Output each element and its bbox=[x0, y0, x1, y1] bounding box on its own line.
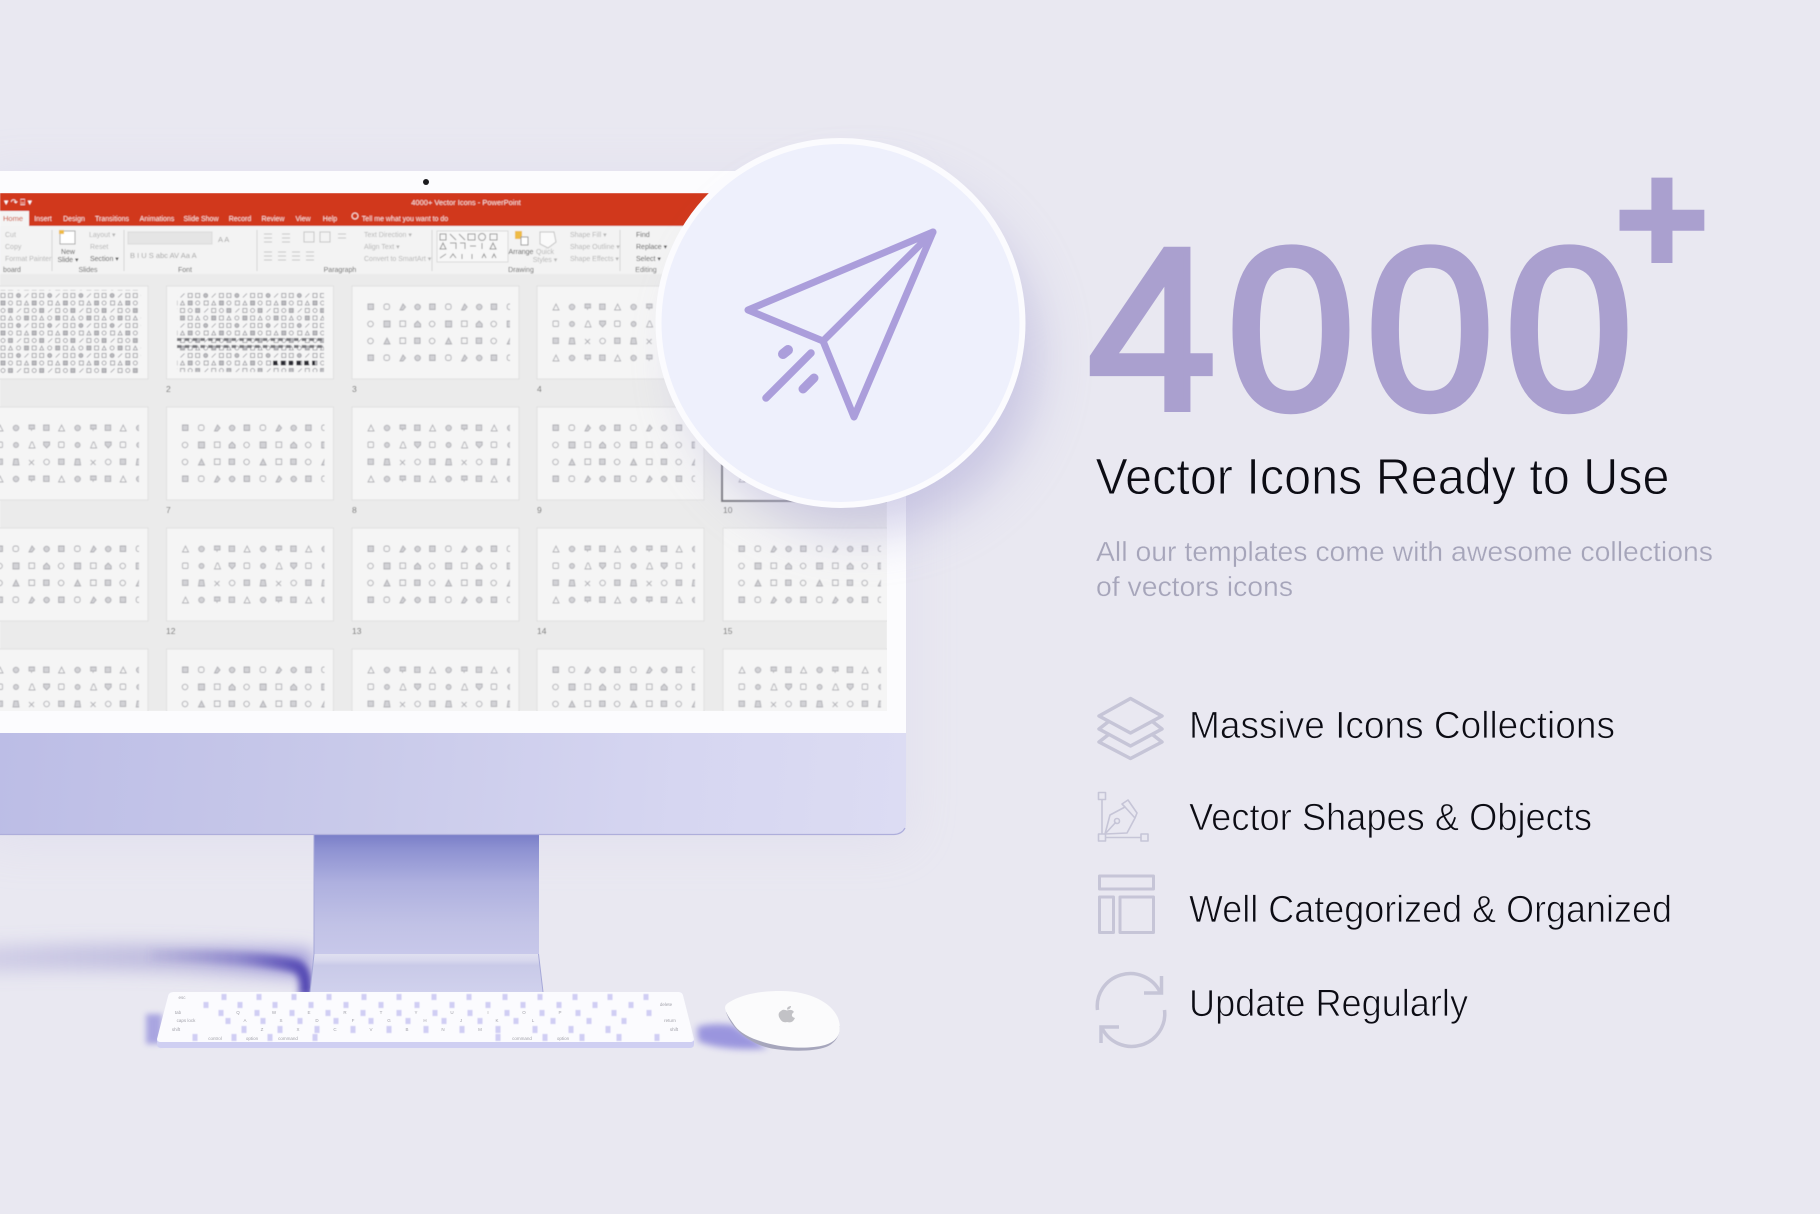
new slide icon bbox=[60, 231, 75, 244]
key labels: T bbox=[380, 1010, 383, 1015]
ribbon: New bbox=[61, 249, 76, 256]
label: Massive Icons Collections bbox=[1189, 705, 1615, 747]
ribbon: board bbox=[3, 267, 21, 274]
ribbon: Align Text ▾ bbox=[364, 244, 400, 251]
key labels: V bbox=[369, 1027, 373, 1032]
icon: refresh arrows bbox=[1097, 974, 1165, 1046]
ribbon tabs: Slide Show bbox=[183, 216, 219, 223]
key gaps bbox=[195, 994, 657, 1041]
key labels bbox=[172, 995, 679, 1041]
key labels: K bbox=[495, 1018, 499, 1023]
key labels: shift bbox=[172, 1027, 181, 1032]
ribbon: Shape Fill ▾ bbox=[570, 232, 607, 239]
feature: update regularly bbox=[1097, 974, 1468, 1046]
screen: PowerPoint window bbox=[0, 193, 891, 742]
key labels: S bbox=[279, 1018, 283, 1023]
key labels: A bbox=[243, 1018, 247, 1023]
slide numbers: 14 bbox=[537, 626, 547, 636]
ribbon: Arrange bbox=[509, 249, 534, 256]
slide numbers: 9 bbox=[537, 505, 542, 515]
slide numbers: 8 bbox=[352, 505, 357, 515]
ribbon: Slide ▾ bbox=[57, 257, 79, 264]
apple logo bbox=[779, 1006, 795, 1022]
slide numbers: 15 bbox=[723, 626, 733, 636]
ribbon tabs bbox=[34, 216, 448, 223]
slide numbers: 10 bbox=[723, 505, 733, 515]
webcam bbox=[423, 179, 429, 185]
ribbon: Select ▾ bbox=[636, 256, 661, 263]
ribbon: Shape Outline ▾ bbox=[570, 244, 620, 251]
circle bbox=[658, 141, 1022, 505]
description bbox=[1096, 536, 1713, 602]
ribbon tabs: Animations bbox=[140, 216, 175, 223]
quick styles icon bbox=[540, 232, 556, 248]
key labels: return bbox=[664, 1018, 676, 1023]
ribbon: Convert to SmartArt ▾ bbox=[364, 256, 432, 263]
key labels: tab bbox=[175, 1010, 182, 1015]
monitor chin bbox=[0, 733, 906, 835]
ribbon tabs: Help bbox=[323, 216, 337, 223]
circle shadow bbox=[687, 181, 1037, 531]
ribbon tabs: Transitions bbox=[95, 216, 129, 223]
ribbon tabs: Record bbox=[229, 216, 251, 223]
keyboard body bbox=[157, 992, 694, 1048]
key labels: G bbox=[387, 1018, 391, 1023]
key labels: L bbox=[532, 1018, 535, 1023]
ribbon: Drawing bbox=[508, 267, 534, 274]
ribbon tabs: Tell me what you want to do bbox=[362, 216, 448, 223]
ribbon: Copy bbox=[5, 244, 22, 251]
key labels: shift bbox=[670, 1027, 679, 1032]
key labels: Z bbox=[261, 1027, 264, 1032]
key labels: B bbox=[405, 1027, 409, 1032]
key labels: control bbox=[208, 1036, 222, 1041]
icon: paper plane bbox=[748, 232, 933, 417]
key labels: J bbox=[460, 1018, 462, 1023]
ribbon: Format Painter bbox=[5, 256, 52, 263]
slide numbers: 12 bbox=[166, 626, 176, 636]
title bar: Home bbox=[3, 214, 23, 223]
white bezel bbox=[0, 171, 906, 733]
home tab bbox=[0, 211, 29, 226]
key labels: O bbox=[522, 1010, 526, 1015]
ribbon tabs: Insert bbox=[34, 216, 52, 223]
ribbon: A A bbox=[218, 235, 229, 244]
key labels: H bbox=[423, 1018, 427, 1023]
ribbon: Shape Effects ▾ bbox=[570, 256, 619, 263]
mouse bbox=[697, 991, 840, 1051]
mouse shadow bbox=[697, 1024, 768, 1049]
mouse top bbox=[725, 991, 840, 1048]
stand bbox=[310, 835, 543, 992]
key labels: R bbox=[343, 1010, 347, 1015]
ribbon: Find bbox=[636, 232, 650, 239]
ribbon: Section ▾ bbox=[90, 256, 119, 263]
icon: layout bbox=[1100, 876, 1154, 932]
icon: layers bbox=[1099, 698, 1162, 758]
label: Well Categorized & Organized bbox=[1189, 889, 1672, 931]
plus sign: + bbox=[1617, 132, 1707, 304]
mouse rim bbox=[726, 1012, 840, 1051]
ribbon: Reset bbox=[90, 244, 108, 251]
description: of vectors icons bbox=[1096, 571, 1293, 602]
ribbon: Font bbox=[178, 267, 192, 274]
key labels: command bbox=[512, 1036, 532, 1041]
ribbon: Replace ▾ bbox=[636, 244, 668, 251]
row 2 bbox=[0, 406, 891, 501]
key labels: esc bbox=[178, 995, 186, 1000]
paragraph controls bbox=[264, 232, 346, 260]
ground shadow of stand bbox=[0, 955, 312, 996]
key labels: option bbox=[557, 1036, 570, 1041]
slide thumbnails bbox=[0, 286, 891, 742]
slide numbers: 2 bbox=[166, 384, 171, 394]
ribbon bbox=[3, 230, 668, 274]
keyboard shadow bbox=[146, 1014, 162, 1044]
callout circle with paper plane bbox=[658, 141, 1037, 531]
icon: pen tool bbox=[1098, 792, 1148, 841]
key labels: delete bbox=[660, 1002, 673, 1007]
quick access: ▾ ↷ ⌸ ▾ bbox=[4, 197, 33, 207]
row 1 bbox=[0, 286, 704, 379]
monitor soft shadow bbox=[0, 175, 910, 843]
key labels: Y bbox=[414, 1010, 418, 1015]
title: Vector Icons Ready to Use bbox=[1096, 448, 1670, 505]
row 3 bbox=[0, 528, 890, 621]
description: All our templates come with awesome collections bbox=[1096, 536, 1713, 567]
key labels: P bbox=[558, 1010, 562, 1015]
ribbon tabs: View bbox=[295, 216, 311, 223]
ribbon: Paragraph bbox=[324, 267, 356, 274]
key labels: U bbox=[450, 1010, 454, 1015]
slide numbers: 7 bbox=[166, 505, 171, 515]
label: Update Regularly bbox=[1189, 983, 1468, 1025]
key labels: M bbox=[478, 1027, 482, 1032]
shapes gallery bbox=[437, 231, 508, 262]
key labels: X bbox=[296, 1027, 300, 1032]
feature: well categorized and organized bbox=[1100, 876, 1672, 932]
key labels: I bbox=[487, 1010, 489, 1015]
key labels: caps lock bbox=[177, 1018, 196, 1023]
ribbon: Editing bbox=[635, 267, 657, 274]
feature: vector shapes and objects bbox=[1098, 792, 1592, 841]
key labels: F bbox=[352, 1018, 355, 1023]
ribbon: Quick bbox=[536, 249, 554, 256]
title bar bbox=[0, 193, 760, 226]
key labels: E bbox=[307, 1010, 311, 1015]
slide numbers: 4 bbox=[537, 384, 542, 394]
slide numbers: 13 bbox=[352, 626, 362, 636]
font controls bbox=[128, 232, 212, 244]
row 4 bbox=[0, 648, 887, 711]
heading number: 4000 bbox=[1088, 200, 1633, 458]
ribbon: Layout ▾ bbox=[89, 232, 116, 239]
ribbon: Styles ▾ bbox=[533, 257, 558, 264]
feature: massive icons collections bbox=[1099, 698, 1615, 758]
key labels: command bbox=[278, 1036, 298, 1041]
ribbon: B I U S abc AV Aa A bbox=[130, 251, 197, 260]
keyboard bbox=[146, 992, 694, 1048]
key labels: D bbox=[315, 1018, 319, 1023]
ribbon tabs: Review bbox=[262, 216, 285, 223]
key labels: Q bbox=[236, 1010, 240, 1015]
key labels: N bbox=[441, 1027, 445, 1032]
key labels: C bbox=[333, 1027, 337, 1032]
ribbon tabs: Design bbox=[63, 216, 85, 223]
ribbon: Text Direction ▾ bbox=[364, 232, 412, 239]
label: Vector Shapes & Objects bbox=[1189, 797, 1592, 839]
slide numbers: 3 bbox=[352, 384, 357, 394]
ribbon: Cut bbox=[5, 232, 16, 239]
key labels: option bbox=[246, 1036, 259, 1041]
arrange icon bbox=[515, 231, 528, 245]
ribbon: Slides bbox=[78, 267, 98, 274]
window title: 4000+ Vector Icons - PowerPoint bbox=[411, 198, 522, 207]
monitor bbox=[0, 171, 910, 996]
slide numbers bbox=[166, 384, 733, 636]
key labels: W bbox=[272, 1010, 277, 1015]
